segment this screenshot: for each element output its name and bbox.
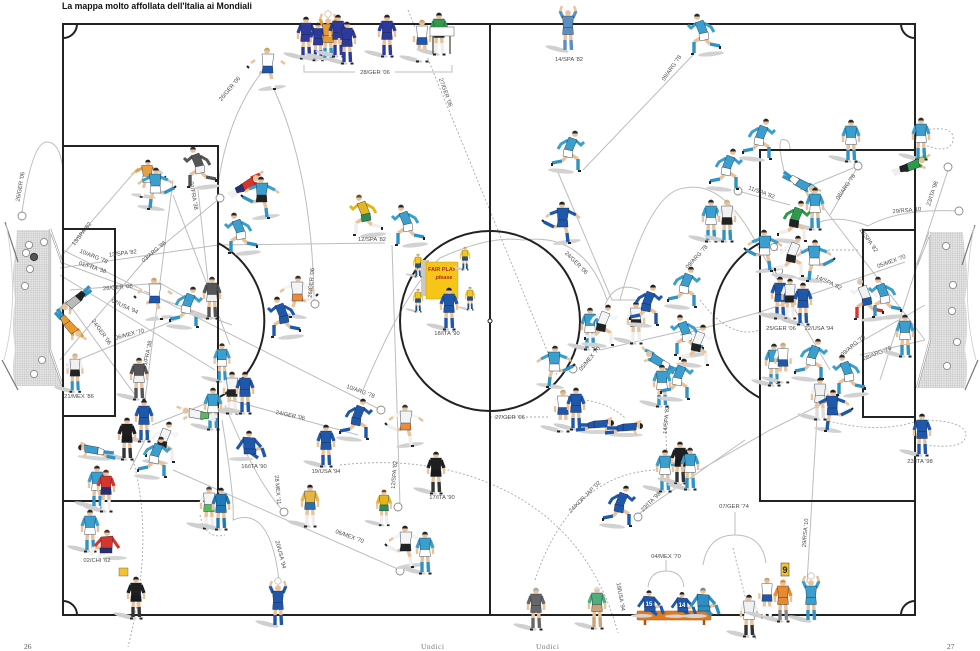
goalkeeper green top — [891, 149, 930, 180]
labels: 03/ARG '86 — [141, 240, 168, 264]
labels: 28/GER '06 — [360, 70, 390, 76]
player: sky 222,505 — [198, 488, 229, 532]
labels: 24/GER '06 — [563, 251, 588, 276]
labels: 26/GER '06 — [15, 172, 27, 202]
player: kid bottom right of poster — [457, 287, 474, 311]
figure: man in suit — [513, 588, 544, 632]
player: lying — [77, 442, 117, 462]
player: dark 143,420 — [121, 400, 152, 444]
player: 14/SPA '82 arms raised — [545, 6, 576, 54]
labels: 16/ITA '90 — [241, 464, 267, 470]
player: sky 812,357 — [791, 339, 827, 383]
right goal — [917, 225, 978, 390]
player: dark 19/USA '94 — [303, 425, 334, 469]
labels: 23/ITA '98 — [640, 491, 662, 513]
player: sky 773,365 — [751, 344, 782, 388]
player: sky 590,325 — [567, 308, 598, 352]
player: sky 665,465 — [642, 450, 673, 494]
player: sky 815,205 — [792, 188, 823, 232]
player: white 19 — [745, 578, 775, 620]
labels: 29/RSA '10 — [892, 207, 922, 215]
player: sky 726,170 — [706, 149, 742, 193]
player: sky 800,180 — [781, 161, 821, 204]
player: sky 690,335 — [671, 315, 707, 359]
player: white-blue 749,612 — [726, 595, 757, 639]
player: white-orange diving — [385, 405, 424, 449]
player: white 233,385 — [209, 372, 240, 416]
player: sky 708,218 — [688, 200, 719, 244]
player: sky 675,378 — [657, 359, 693, 403]
player: sky 660,385 — [639, 365, 670, 409]
player: sky 408,228 — [392, 205, 428, 249]
player: gray 140,378 — [116, 358, 147, 402]
player: white 563,407 — [540, 390, 571, 434]
player: red 105,487 — [83, 470, 114, 514]
player: 21/MEX '86 — [54, 353, 82, 394]
footer: page number left: 26 — [24, 642, 32, 651]
labels: 18/ITA '90 — [434, 331, 460, 337]
player: dark 357,418 — [336, 399, 372, 443]
player: top kicker — [247, 48, 286, 92]
player: white 14 — [613, 302, 644, 346]
player: gray 212,295 — [189, 277, 220, 321]
player: 29/RSA '10 throw-in — [788, 573, 819, 624]
player: lying 595,425 — [576, 418, 614, 434]
player: sky 553,365 — [536, 346, 575, 390]
labels: 13/SPA '82 — [71, 221, 93, 247]
labels: 11/SPA '82 — [747, 186, 775, 201]
player: sky 262,197 — [241, 177, 280, 221]
player: sky 240,236 — [225, 213, 261, 257]
labels: 19/USA '94 — [312, 469, 341, 475]
fourth official with number board: 9 — [782, 565, 788, 575]
referee: black 680,460 — [657, 442, 688, 486]
player: sky 850,142 — [828, 120, 859, 164]
player: sitting 250,447 — [229, 431, 265, 461]
footer: Undici right: Undici — [536, 642, 559, 651]
labels: 13/SPA '82 — [109, 249, 137, 259]
player: sky 685,288 — [664, 267, 700, 311]
labels: 01/FRA '38 — [188, 181, 198, 210]
labels: 06/MEX '70 — [115, 328, 145, 342]
player: dark 782,295 — [757, 277, 788, 321]
player: striped 162,440 — [142, 422, 178, 466]
labels: 08/ARG '78 — [863, 346, 893, 362]
player: dark 563,222 — [542, 202, 581, 246]
labels: 09/ARG '78 — [685, 244, 709, 270]
labels: 14/SPA '82 — [814, 274, 842, 292]
player: 23/ITA '98 — [899, 414, 930, 458]
player: kid top left of poster — [405, 254, 422, 278]
player: sky 97,480 — [74, 466, 105, 510]
labels: 27/GER '06 — [495, 415, 525, 421]
player: sky 187,308 — [166, 287, 202, 331]
player: white 408,545 — [385, 526, 424, 570]
labels: 10/ARG '78 — [78, 249, 108, 265]
player: dark 245,385 — [222, 372, 253, 416]
labels: 09/ARG '78 — [840, 334, 867, 358]
goalkeeper green 795,220 — [774, 201, 810, 245]
player: gray 200,165 — [184, 147, 220, 191]
labels: 25/GER '06 — [766, 326, 796, 332]
poster: fair play: FAIR PLAY — [428, 267, 456, 273]
player: yellow-blue 310,505 — [287, 485, 318, 529]
player: red 245,183 — [228, 171, 263, 197]
labels: 01/FRA '38 — [78, 261, 107, 275]
labels: 02/CHI '62 — [83, 558, 111, 564]
player: sky 815,262 — [796, 240, 835, 284]
referee with card — [104, 418, 135, 462]
player: white 790,300 — [768, 279, 798, 321]
labels: 24/KOR-JAP '02 — [568, 480, 602, 514]
football pitch markings — [63, 24, 915, 615]
player: white 820,395 — [797, 378, 828, 422]
player: striped 728,220 — [704, 200, 735, 244]
labels: 23/ITA '98 — [907, 459, 933, 465]
player: dark 620,505 — [599, 486, 635, 530]
labels: 29/RSA '10 — [802, 518, 810, 548]
player: dark 285,315 — [268, 297, 304, 341]
title: La mappa molto affollata dell'Italia ai Mondiali — [62, 1, 252, 12]
labels: 14/SPA '82 — [555, 57, 583, 63]
labels: 26/GER '06 — [308, 268, 316, 298]
player: green and red — [364, 15, 395, 59]
labels: 12/SPA '82 — [391, 461, 399, 489]
goalkeeper gray — [56, 278, 92, 320]
player: white kicker 155,300 — [134, 278, 173, 322]
player: white-dark 866,300 — [851, 279, 887, 323]
labels: 22/USA '94 — [805, 326, 834, 332]
player: sitting red — [91, 530, 127, 560]
player: dark 648,305 — [626, 285, 662, 329]
player: sky 885,297 — [869, 277, 905, 321]
player: dark 833,410 — [814, 390, 853, 434]
poster: fair play: please — [435, 275, 452, 281]
player: lying green — [177, 395, 219, 431]
player: sky 920,140 — [898, 118, 929, 162]
balls — [18, 162, 963, 575]
figure: man in green shirt — [574, 587, 605, 631]
bench with substitutes: 14 — [679, 603, 686, 609]
labels: 14/SPA '82 — [663, 406, 671, 434]
labels: 17/ITA '90 — [429, 495, 455, 501]
player: sky 10 — [882, 315, 913, 359]
labels: 28 MEX '11 — [273, 475, 281, 505]
player: sky 213,400 — [190, 388, 221, 432]
labels: 07/GER '74 — [719, 504, 750, 510]
player: sky 667,358 — [642, 347, 677, 373]
player: white 298,295 — [279, 276, 318, 320]
player: white 602,325 — [581, 305, 617, 349]
labels: 09/ARG '78 — [661, 55, 683, 82]
labels: 19/USA '94 — [615, 582, 626, 612]
player: sky 14 — [744, 230, 783, 274]
player: kid top right of poster — [452, 247, 469, 271]
labels: 12/SPA '82 — [358, 237, 386, 243]
player: green 208,505 — [186, 487, 217, 531]
labels: 05/MEX '70 — [578, 346, 602, 373]
group: German bench 28/GER '06 — [283, 11, 355, 66]
player: dark 802,300 — [780, 283, 811, 327]
player: kid bottom left of poster — [405, 289, 422, 313]
bench with substitutes — [631, 588, 719, 625]
labels: 21/MEX '86 — [64, 394, 94, 400]
player: striped 3 — [676, 325, 712, 369]
labels: 26/GER '06 — [218, 76, 242, 103]
player: white 30 — [771, 236, 807, 280]
player: top right runner — [688, 14, 724, 58]
labels: 13/SPA '82 — [857, 227, 878, 254]
player: yellow 385,505 — [364, 490, 391, 527]
player: white 781,362 — [761, 343, 791, 385]
player: sky 155,455 — [134, 437, 170, 481]
labels: 10/ARG '78 — [345, 384, 375, 400]
goalkeeper orange — [55, 305, 86, 344]
labels: 27/GER '06 — [437, 78, 453, 108]
player: sky 848,375 — [833, 355, 869, 399]
left goal — [2, 222, 63, 390]
labels: 01/FRA '38 — [142, 340, 154, 369]
linesman — [113, 577, 144, 621]
labels: 06/MEX '70 — [334, 529, 364, 545]
player: white 10 — [399, 20, 430, 64]
player: tackle sky — [137, 168, 176, 212]
player: 18/ITA '90 — [426, 288, 457, 332]
footer: Undici left: Undici — [421, 642, 444, 651]
footer: page number right: 27 — [947, 642, 955, 651]
labels: 20/USA '94 — [273, 540, 287, 570]
player: dark 576,405 — [553, 388, 584, 432]
player: lying 625,428 — [605, 421, 643, 437]
labels: 23/ITA '98 — [926, 181, 940, 207]
player: sky 760,140 — [739, 119, 775, 163]
player: sky 570,152 — [548, 131, 584, 175]
player: sky 27 — [667, 448, 698, 492]
player: yellow 365,218 — [350, 195, 386, 239]
labels: 04/MEX '70 — [651, 554, 681, 560]
referee 17/ITA '90 — [413, 452, 444, 496]
labels: 05/MEX '70 — [877, 254, 907, 270]
fourth official with number board — [760, 563, 791, 624]
table with official — [416, 13, 454, 57]
labels: 24/GER '06 — [90, 319, 112, 346]
labels: 24/GER '06 — [275, 410, 305, 422]
player: sky 425,550 — [402, 532, 433, 576]
bench with substitutes: 15 — [646, 602, 653, 608]
player: sky 222,355 — [201, 343, 229, 384]
labels: 07/USA '94 — [110, 298, 139, 316]
player: tackle orange — [131, 160, 166, 200]
poster: fair play — [421, 260, 458, 299]
player: sky 90,530 — [67, 510, 98, 554]
labels: 08/ARG '78 — [835, 174, 857, 201]
player: throw-in 6 — [255, 578, 286, 629]
corner flag — [119, 568, 128, 576]
labels: 26/GER '06 — [103, 284, 133, 292]
